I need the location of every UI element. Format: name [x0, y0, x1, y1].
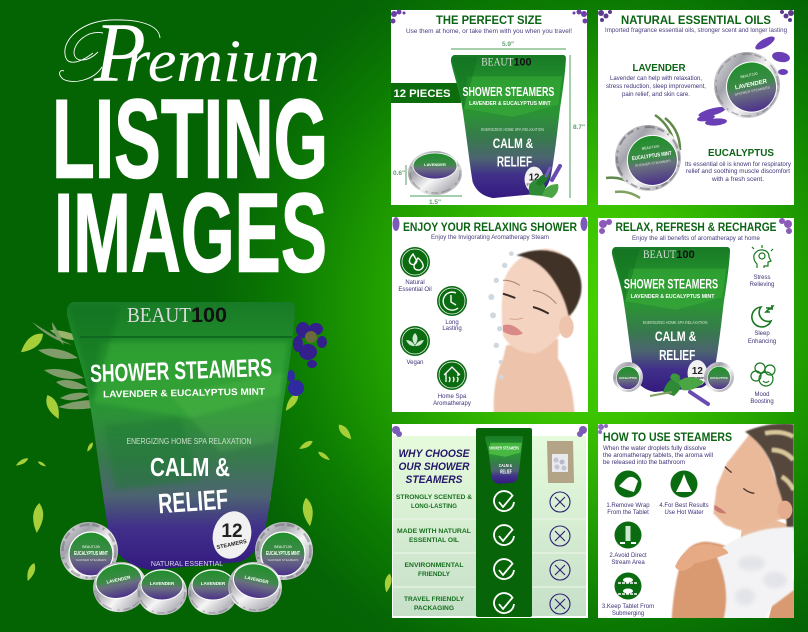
lavender text	[606, 76, 706, 98]
panel 5 heading: STEAMERS	[406, 474, 463, 486]
label: natural essential oil	[398, 280, 432, 293]
label: hot water: 4.For Best Results	[659, 503, 709, 509]
lavender tablet: SHOWER STEAMERS	[734, 85, 771, 97]
label: home spa aromatherapy: Aromatherapy	[433, 401, 471, 407]
title	[52, 6, 328, 296]
mini product bag: CALM &	[499, 463, 513, 468]
label: stress relieving: Stress	[753, 275, 771, 281]
tablet: eucalyptus right: SHOWER STEAMERS	[268, 558, 298, 562]
label: avoid stream	[609, 553, 647, 566]
eucalyptus tablet	[611, 121, 685, 195]
label: remove wrap	[606, 503, 650, 516]
product bag: ENERGIZING HOME SPA RELAXATION	[643, 320, 707, 325]
row 3 label: ENVIRONMENTAL	[404, 562, 464, 569]
title: Premium	[60, 6, 320, 100]
mini product bag	[485, 436, 523, 484]
tablet: lavender 1	[88, 557, 152, 617]
large product bag: 100	[191, 304, 227, 327]
lavender text: stress reduction, sleep improvement,	[606, 84, 706, 90]
panel 6 body text: the aromatherapy tablets, the aroma will	[603, 452, 714, 459]
label: home spa aromatherapy: Home Spa	[438, 394, 467, 400]
icon: avoid stream	[614, 522, 642, 548]
eucalyptus tablet: EUCALYPTUS MINT	[632, 151, 673, 162]
row 3 label: FRIENDLY	[418, 571, 451, 578]
panel: natural essential oils	[598, 10, 794, 205]
label: hot water	[659, 503, 709, 516]
floating leaves	[15, 330, 393, 593]
tablet: eucalyptus right	[255, 522, 313, 580]
icon: hot water	[670, 470, 698, 498]
eucalyptus text: Its essential oil is known for respiratory	[685, 162, 791, 168]
icon: check marks	[494, 491, 514, 613]
product bag: CALM &	[493, 136, 533, 151]
title: Premium: remium	[125, 28, 320, 94]
width dimension: 5.9"	[502, 41, 514, 48]
product bag: ENERGIZING HOME SPA RELAXATION	[481, 127, 544, 132]
product bag	[451, 55, 566, 198]
product bag: SHOWER STEAMERS	[463, 84, 555, 99]
panel 2 corner lavender	[598, 10, 794, 22]
highlighted column	[476, 428, 532, 617]
label: keep from submerging	[602, 604, 654, 617]
row 1 label: STRONGLY SCENTED &	[396, 494, 472, 501]
icon: vegan	[400, 326, 430, 356]
row 4 label: TRAVEL FRIENDLY	[404, 596, 465, 603]
12 pieces banner: 12 PIECES	[394, 88, 450, 100]
large product bag: STEAMERS	[216, 539, 248, 551]
row 2 label: ESSENTIAL OIL	[409, 537, 459, 544]
label: long lasting	[442, 320, 462, 332]
row 1 label	[396, 494, 472, 510]
tablet: lavender 2: LAVENDER	[150, 581, 175, 586]
panel 6 body text: When the water droplets fully dissolve	[603, 445, 706, 452]
label: mood boosting	[750, 392, 774, 405]
panel: the perfect size	[390, 10, 588, 206]
label: remove wrap: 1.Remove Wrap	[606, 503, 650, 509]
product bag: 100	[513, 56, 532, 69]
lavender heading: LAVENDER	[632, 63, 686, 74]
product bag: RELIEF	[659, 348, 695, 364]
row 4 label: PACKAGING	[414, 605, 454, 612]
panel: why choose	[392, 424, 588, 618]
right tablet: EUCALYPTUS	[710, 376, 728, 380]
large product bag: RELIEF	[157, 484, 229, 519]
tablet: eucalyptus right: BEAUT100	[274, 545, 292, 549]
tablet: eucalyptus right: EUCALYPTUS MINT	[266, 551, 300, 557]
eucalyptus text: with a fresh scent.	[711, 177, 764, 183]
eucalyptus text: relief and soothing muscle discomfort	[686, 169, 790, 175]
tablet: lavender 3	[188, 569, 238, 615]
label: keep from submerging: 3.Keep Tablet From	[602, 604, 654, 610]
eucalyptus tablet: BEAUT100	[642, 144, 660, 151]
label: remove wrap: From the Tablet	[607, 510, 649, 516]
icon: long lasting	[437, 286, 467, 316]
mint and lavender sprig	[529, 166, 560, 198]
tablet height dimension	[393, 165, 406, 185]
panel 3 heading: ENJOY YOUR RELAXING SHOWER	[403, 220, 577, 234]
tablet with dimensions: LAVENDER	[424, 162, 446, 167]
label: stress relieving	[750, 275, 774, 288]
label: long lasting: Lasting	[442, 326, 462, 332]
icon: mood boosting	[751, 363, 775, 386]
panel 6 heading: HOW TO USE STEAMERS	[603, 430, 732, 444]
tablet height dimension: 0.6"	[393, 170, 405, 177]
label: sleep enhancing: Sleep	[754, 331, 770, 337]
title: IMAGES: IMAGES	[54, 170, 327, 296]
product bag: STEAMERS	[526, 182, 542, 186]
label: sleep enhancing	[748, 331, 776, 345]
label: natural essential oil: Natural	[405, 280, 425, 286]
row 2 label	[397, 528, 471, 544]
panel 2 heading: NATURAL ESSENTIAL OILS	[621, 13, 771, 27]
panel: enjoy your relaxing shower	[392, 217, 588, 415]
icon: remove wrap	[614, 470, 642, 498]
tablet: lavender 1: LAVENDER	[106, 575, 132, 585]
tablet width dimension	[410, 196, 462, 206]
left tablet	[613, 362, 643, 392]
mini product bag: RELIEF	[500, 469, 512, 475]
panel 5 heading: WHY CHOOSE	[398, 448, 470, 460]
row dividers	[393, 519, 586, 587]
tablet: eucalyptus left	[60, 522, 118, 580]
large product bag: CALM &	[150, 452, 230, 482]
icon: home spa	[437, 360, 467, 390]
product bag: LAVENDER & EUCALYPTUS MINT	[631, 294, 715, 300]
icon: stress relieving	[752, 245, 773, 268]
panel 1 subtitle: Use them at home, or take them with you when you travel!	[406, 28, 572, 35]
panel 1 corner lavender	[390, 10, 588, 24]
eucalyptus tablet: SHOWER STEAMERS	[635, 159, 672, 168]
panel 6 body text	[603, 445, 714, 466]
large product bag: 12	[221, 521, 243, 542]
panel: how to use steamers	[598, 424, 794, 620]
lavender tablet: LAVENDER	[735, 79, 768, 91]
right tablet	[704, 362, 734, 392]
eucalyptus sprigs	[606, 115, 680, 198]
large product bag: ENERGIZING HOME SPA RELAXATION	[126, 437, 252, 446]
tablet: eucalyptus left: SHOWER STEAMERS	[76, 558, 106, 562]
product bag: SHOWER STEAMERS	[624, 276, 718, 292]
large product bag: LAVENDER & EUCALYPTUS MINT	[103, 387, 265, 400]
product bag: 12	[692, 366, 703, 377]
title: Premium: P	[93, 6, 146, 100]
tablet with dimensions	[408, 151, 462, 195]
product bag: STEAMERS	[689, 376, 705, 380]
large product bag: NATURAL ESSENTIAL	[151, 561, 223, 568]
row 1 label: LONG-LASTING	[411, 503, 457, 510]
eucalyptus branch behind bag	[32, 322, 92, 409]
icon: essential oil	[400, 247, 430, 277]
left tablet: EUCALYPTUS	[619, 376, 637, 380]
lavender text: pain relief, and skin care.	[622, 92, 690, 98]
icon: keep from submerging	[614, 572, 642, 600]
panel 3 subtitle: Enjoy the Invigorating Aromatherapy Steam	[431, 234, 549, 241]
product bag: LAVENDER & EUCALYPTUS MINT	[469, 101, 551, 107]
tablets in front of large bag	[60, 522, 313, 617]
competitor kraft pouch	[547, 441, 574, 483]
row 4 label	[404, 596, 465, 612]
row 2 label: MADE WITH NATURAL	[397, 528, 471, 535]
large product bag	[67, 302, 295, 570]
panel 5 corner lavender	[392, 426, 587, 437]
product bag: RELIEF	[497, 154, 532, 171]
label: hot water: Use Hot Water	[664, 510, 704, 516]
lavender sprigs	[697, 34, 791, 126]
label: sleep enhancing: Enhancing	[748, 339, 776, 345]
product bag: BEAUT	[643, 249, 676, 261]
label: avoid stream: 2.Avoid Direct	[609, 553, 647, 559]
tablet: lavender 4	[223, 557, 287, 617]
panel 6 body text: be released into the bathroom	[603, 459, 685, 466]
mint and lavender	[650, 373, 708, 404]
row 3 label	[404, 562, 464, 578]
tablet: lavender 3: LAVENDER	[201, 581, 226, 586]
label: long lasting: Long	[445, 320, 459, 326]
lavender tablet	[708, 46, 786, 124]
product bag: 12	[529, 172, 540, 184]
width dimension	[451, 41, 566, 49]
12 pieces banner	[391, 83, 461, 103]
lavender behind bag	[287, 322, 327, 396]
height dimension: 8.7"	[573, 124, 585, 131]
panel 4 heading: RELAX, REFRESH & RECHARGE	[616, 222, 777, 234]
eucalyptus heading: EUCALYPTUS	[708, 148, 774, 159]
tablet: eucalyptus left: EUCALYPTUS MINT	[74, 551, 108, 557]
lavender tablet: BEAUT100	[740, 72, 758, 79]
panel 5 heading: OUR SHOWER	[398, 461, 470, 473]
panel 6 corner lavender	[598, 424, 608, 434]
label: stress relieving: Relieving	[750, 282, 774, 288]
label: keep from submerging: Submerging	[612, 611, 644, 617]
icon: sleep enhancing	[752, 306, 773, 327]
tablet: eucalyptus left: BEAUT100	[82, 545, 100, 549]
panel 5 heading	[398, 448, 470, 486]
panel 4 subtitle: Enjoy the all benefits of aromatherapy at home	[632, 235, 760, 242]
tablet width dimension: 1.5"	[429, 199, 441, 206]
label: mood boosting: Boosting	[750, 399, 774, 405]
eucalyptus text	[685, 162, 791, 183]
panel 3 woman with water	[488, 249, 581, 415]
large product bag: BEAUT	[127, 303, 191, 327]
panel: relax refresh recharge	[598, 218, 794, 412]
label: natural essential oil: Essential Oil	[398, 287, 432, 293]
title: LISTING: LISTING	[52, 76, 328, 202]
label: mood boosting: Mood	[754, 392, 770, 398]
mini product bag: SHOWER STEAMERS	[489, 446, 519, 451]
icon: cross marks	[550, 492, 570, 614]
product bag: 100	[676, 249, 695, 261]
label: vegan: Vegan	[406, 360, 424, 366]
label: avoid stream: Stream Area	[611, 560, 645, 566]
tablet: lavender 4: LAVENDER	[244, 575, 270, 585]
product bag: BEAUT	[481, 56, 514, 69]
panel 1 heading: THE PERFECT SIZE	[436, 13, 542, 27]
product bag	[612, 247, 730, 392]
panel 2 subtitle: Imported fragrance essential oils, stronger scent and longer lasting	[605, 27, 787, 34]
panel 3 corner lavender	[392, 217, 588, 231]
panel 4 corner lavender	[599, 218, 792, 234]
label: home spa aromatherapy	[433, 394, 471, 407]
lavender text: Lavender can help with relaxation,	[610, 76, 702, 82]
product bag: CALM &	[655, 329, 696, 344]
panel 6 woman in shower	[672, 424, 794, 620]
tablet: lavender 2	[137, 569, 187, 615]
large product bag: SHOWER STEAMERS	[90, 354, 272, 388]
